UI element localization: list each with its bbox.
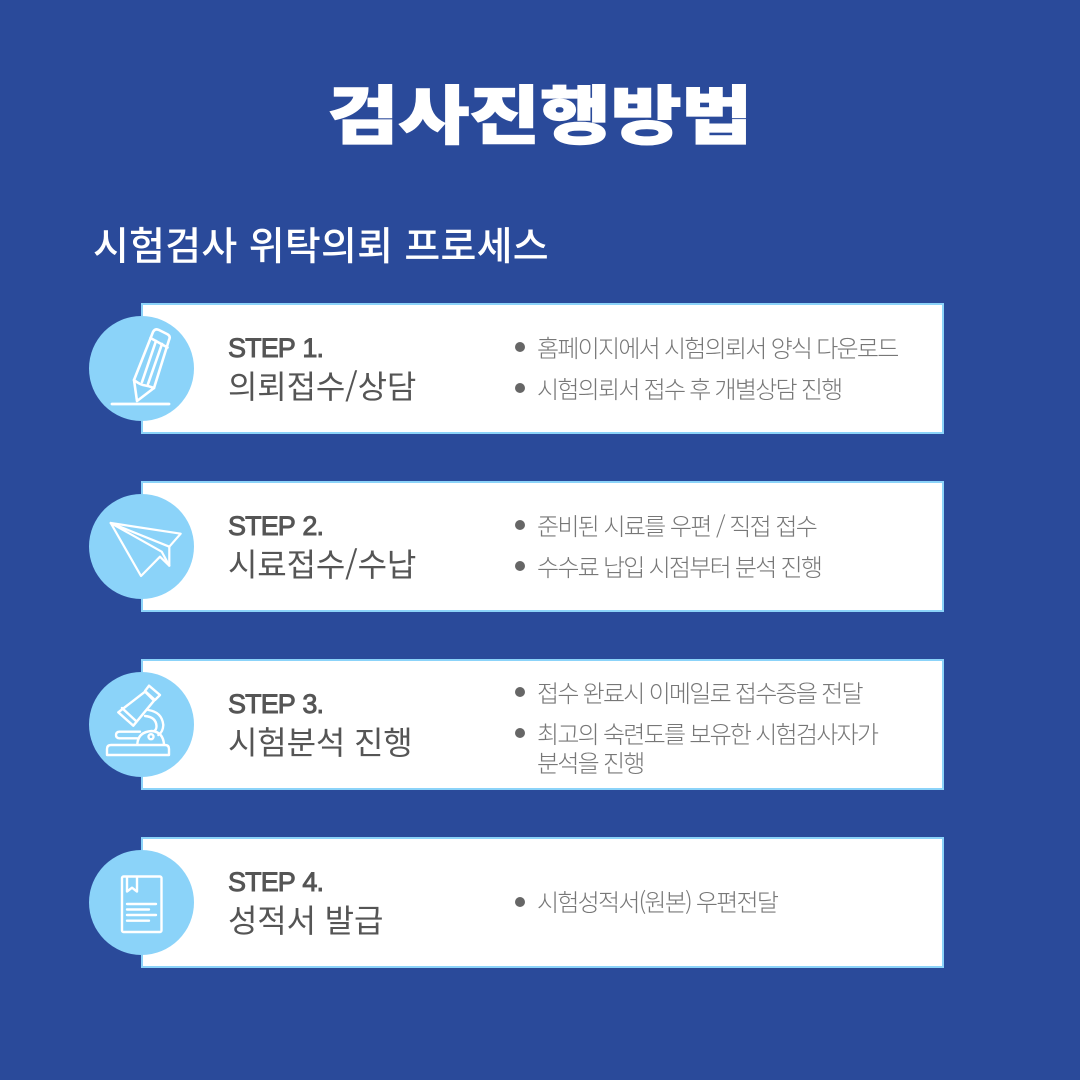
icon circle <box>89 494 194 599</box>
icon: pencil <box>110 328 171 406</box>
bullet marker <box>515 342 525 352</box>
panel: step 2 <box>89 481 944 612</box>
bullet marker <box>515 561 525 571</box>
card background <box>141 837 944 968</box>
bullet marker <box>515 687 525 697</box>
bullet marker <box>515 728 525 738</box>
step label: STEP 2. <box>228 511 323 541</box>
bullet marker <box>515 520 525 530</box>
bullet marker <box>515 383 525 393</box>
title: 검사진행방법 <box>328 65 752 157</box>
bullet text: 준비된 시료를 우편 / 직접 접수 <box>537 507 816 542</box>
bullet text: 시험의뢰서 접수 후 개별상담 진행 <box>537 370 842 405</box>
step label: STEP 3. <box>228 689 323 719</box>
bullet text <box>537 715 878 779</box>
bullet text: 최고의 숙련도를 보유한 시험검사자가 <box>537 715 877 750</box>
bullet text: 홈페이지에서 시험의뢰서 양식 다운로드 <box>537 329 898 364</box>
bullet text: 시험성적서(원본) 우편전달 <box>537 883 777 918</box>
icon circle <box>89 316 194 421</box>
card background <box>141 303 944 434</box>
icon circle <box>89 672 194 777</box>
subheading: 시험검사 위탁의뢰 프로세스 <box>93 216 549 272</box>
step name: 시료접수/수납 <box>228 540 416 586</box>
icon: paper plane <box>110 522 182 578</box>
card background <box>141 481 944 612</box>
step name: 의뢰접수/상담 <box>228 362 416 408</box>
bullet marker <box>515 897 525 907</box>
bullet text: 분석을 진행 <box>537 744 644 779</box>
card background <box>141 659 944 790</box>
step label: STEP 4. <box>228 867 323 897</box>
step label: STEP 1. <box>228 333 323 363</box>
step name: 시험분석 진행 <box>228 718 413 764</box>
panel: step 4 <box>89 837 944 968</box>
icon: report book <box>120 875 163 934</box>
bullet text: 접수 완료시 이메일로 접수증을 전달 <box>537 674 862 709</box>
icon circle <box>89 850 194 955</box>
bullet text: 수수료 납입 시점부터 분석 진행 <box>537 548 821 583</box>
icon: microscope <box>106 684 170 756</box>
panel: step 3 <box>89 659 944 790</box>
panel: step 1 <box>89 303 944 434</box>
step name: 성적서 발급 <box>228 896 383 942</box>
